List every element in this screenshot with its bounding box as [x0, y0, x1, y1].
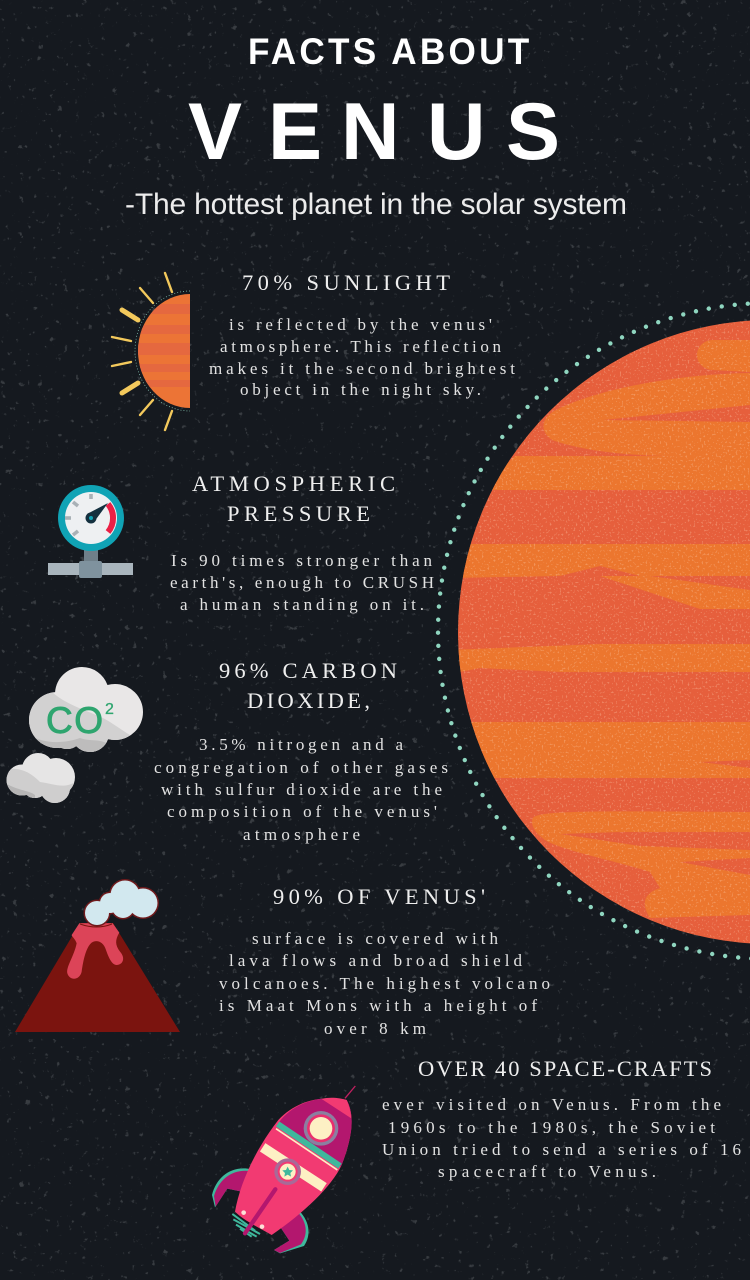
subtitle: -The hottest planet in the solar system: [125, 188, 627, 221]
text block: 70% sunlight: [209, 270, 515, 399]
dotted orbit: [438, 303, 750, 959]
text block: spacecraft: spacecraft to Venus.: [438, 1162, 656, 1181]
text block: carbon dioxide: congregation of other gases: [154, 758, 448, 777]
text block: 70% sunlight: object in the night sky.: [240, 380, 481, 399]
fins: [212, 1168, 252, 1207]
icon: sun half planet: [112, 273, 192, 430]
text block: spacecraft: 1960s to the 1980s, the Soviet: [388, 1118, 715, 1137]
icon: CO2 clouds: [6, 667, 143, 803]
CO2 label: CO: [46, 700, 103, 741]
text block: carbon dioxide: 96% CARBON: [219, 658, 397, 683]
text block: 70% sunlight: is reflected by the venus': [229, 315, 492, 334]
planet: Venus with dotted orbit: [438, 303, 750, 959]
text block: atmospheric pressure: earth's, enough to CRUSH: [170, 573, 434, 592]
text block: spacecraft: Union tried to send a series of 16: [382, 1140, 741, 1159]
small cloud: [6, 753, 75, 803]
heading: facts about: FACTS ABOUT: [248, 30, 529, 72]
text block: spacecraft: [382, 1056, 741, 1181]
text block: spacecraft: ever visited on Venus. From the: [382, 1095, 721, 1114]
nozzle: [232, 1214, 260, 1237]
text block: atmospheric pressure: [170, 471, 434, 614]
heading: Venus: VENUS: [188, 87, 560, 177]
icon: pressure gauge: [48, 485, 133, 578]
text block: 70% sunlight: makes it the second brightest: [209, 359, 515, 378]
icon: rocket: [212, 1086, 355, 1253]
text block: 70% sunlight: 70% SUNLIGHT: [242, 270, 450, 295]
text block: atmospheric pressure: ATMOSPHERIC: [192, 471, 395, 496]
text block: carbon dioxide: with sulfur dioxide are the: [161, 780, 442, 799]
text block: 90% of Venus: 90% OF VENUS': [273, 884, 485, 909]
icon: volcano: [15, 879, 180, 1032]
icon: CO2 clouds: 2: [105, 701, 114, 718]
planet disc: [450, 315, 750, 955]
text block: 90% of Venus: lava flows and broad shield: [229, 951, 522, 970]
text block: atmospheric pressure: a human standing on it.: [180, 595, 424, 614]
text block: 90% of Venus: over 8 km: [324, 1019, 426, 1038]
text block: atmospheric pressure: Is 90 times stronger than: [171, 551, 432, 570]
smoke: [84, 879, 159, 926]
text block: 70% sunlight: atmosphere. This reflection: [220, 337, 502, 356]
text block: carbon dioxide: [154, 658, 448, 844]
sun rays: [112, 273, 172, 430]
text block: 90% of Venus: is Maat Mons with a height of: [219, 996, 537, 1015]
text block: carbon dioxide: 3.5% nitrogen and a: [199, 735, 403, 754]
text block: carbon dioxide: composition of the venus': [167, 802, 437, 821]
text block: spacecraft: OVER 40 SPACE-CRAFTS: [418, 1056, 712, 1081]
half disc: [138, 294, 190, 408]
text block: 90% of Venus: surface is covered with: [252, 929, 498, 948]
body: [235, 1098, 352, 1235]
text block: carbon dioxide: DIOXIDE,: [247, 688, 370, 713]
text block: 90% of Venus: volcanoes. The highest volcano: [219, 974, 550, 993]
big cloud: [29, 667, 143, 752]
text block: atmospheric pressure: PRESSURE: [227, 501, 370, 526]
text block: 90% of Venus: [219, 884, 550, 1038]
text block: carbon dioxide: atmosphere: [243, 825, 360, 844]
